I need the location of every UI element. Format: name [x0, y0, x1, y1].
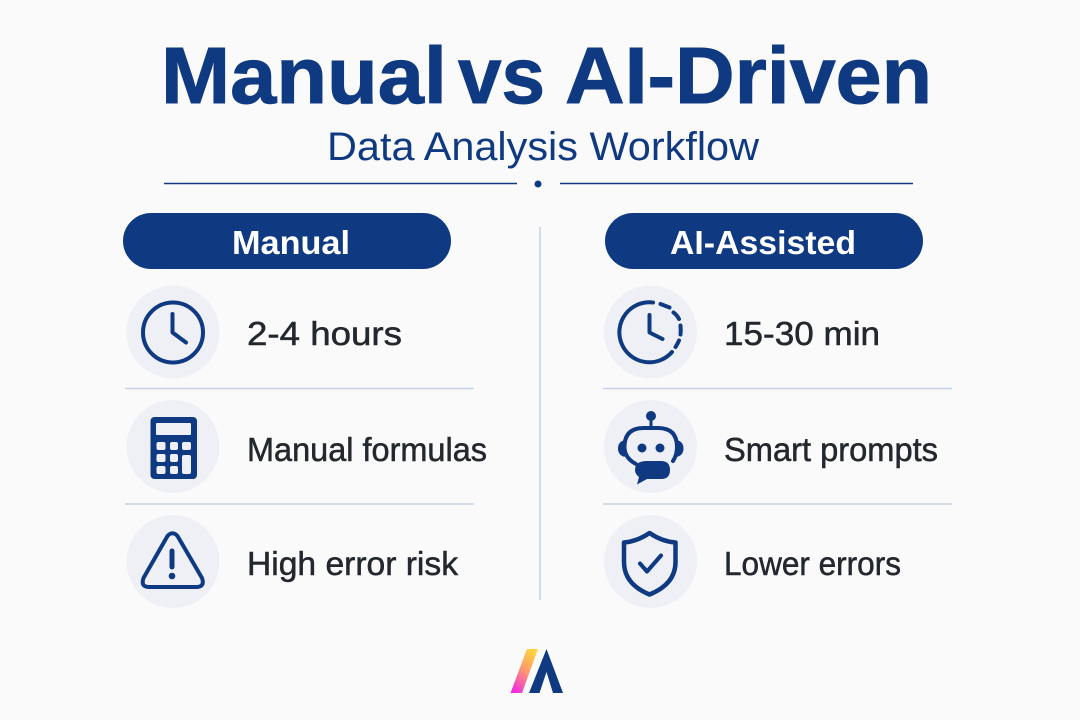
title — [161, 31, 932, 120]
manual header pill: Manual — [232, 224, 350, 261]
icon: warning triangle — [126, 515, 220, 608]
icon: dashed clock — [604, 286, 697, 378]
AI-assisted header pill: AI-Assisted — [670, 224, 856, 261]
icon: brand logo — [510, 649, 563, 693]
panel: AI-assisted column — [603, 213, 952, 608]
row: method AI — [604, 400, 938, 493]
label: lower errors: Lower errors — [724, 545, 901, 582]
icon: calculator — [126, 400, 220, 493]
icon: robot with chat bubble — [604, 400, 697, 493]
title: AI-Driven — [565, 31, 932, 120]
row: method manual — [126, 400, 487, 493]
label: manual formulas: Manual formulas — [247, 431, 487, 468]
manual header pill — [123, 213, 451, 269]
icon: shield with check — [604, 515, 697, 608]
column divider — [539, 227, 541, 600]
row: time AI — [604, 286, 880, 378]
icon: clock — [126, 286, 220, 378]
subtitle: Data Analysis Workflow — [327, 125, 759, 169]
row: risk manual — [126, 515, 459, 608]
title: Manual — [161, 31, 447, 120]
row: time manual — [126, 286, 402, 378]
title divider — [164, 180, 913, 188]
label: high error risk: High error risk — [247, 545, 459, 582]
label: smart prompts: Smart prompts — [724, 431, 938, 468]
label: 2-4 hours: 2-4 hours — [247, 315, 402, 352]
label: 15-30 min: 15-30 min — [724, 315, 880, 352]
row: errors AI — [604, 515, 901, 608]
title: vs — [458, 31, 545, 120]
AI-assisted header pill — [605, 213, 923, 269]
panel: manual column — [123, 213, 487, 608]
